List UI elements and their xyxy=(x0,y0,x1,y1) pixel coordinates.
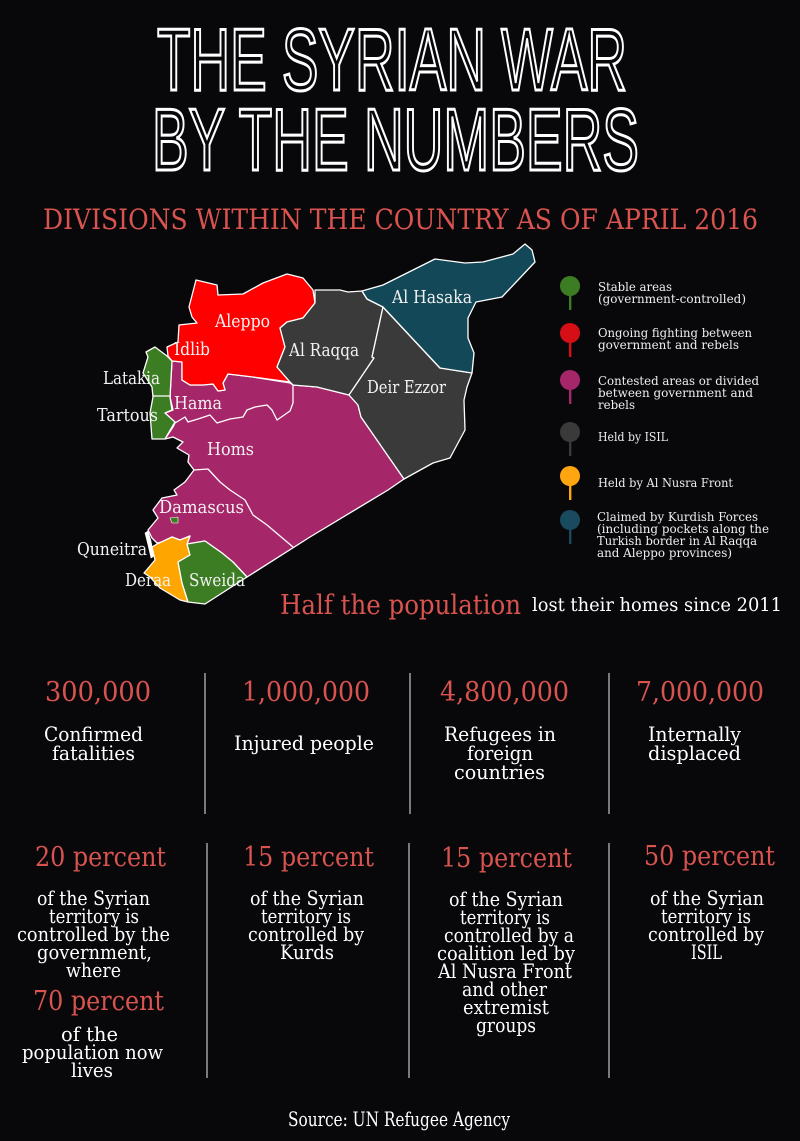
stat: injured xyxy=(234,677,374,755)
stat: refugees: countries xyxy=(454,760,545,784)
legend text: contested: Contested areas or divided xyxy=(598,373,759,388)
legend pin: Kurdish xyxy=(560,510,580,544)
stat: refugees: Refugees in xyxy=(444,722,556,746)
territory: ISIL: of the Syrian xyxy=(650,886,764,910)
region: Sweida xyxy=(178,541,247,604)
stat: refugees: 4,800,000 xyxy=(440,677,569,708)
territory: Kurds: 15 percent xyxy=(243,842,374,873)
headline: half the population: Half the population xyxy=(280,590,521,621)
legend pin: contested xyxy=(560,370,580,404)
territory: Al Nusra coalition: of the Syrian xyxy=(449,887,563,911)
stat: fatalities: fatalities xyxy=(52,741,135,765)
territory: Kurds: territory is xyxy=(261,904,351,928)
legend text: contested: between government and xyxy=(598,385,753,400)
map labels: Damascus xyxy=(159,497,244,518)
legend pin: Al Nusra xyxy=(560,466,580,500)
territory: Al Nusra coalition: 15 percent xyxy=(441,843,572,874)
map labels: Idlib xyxy=(174,339,210,360)
region: Quneitra xyxy=(145,531,154,558)
legend text: Kurdish: (including pockets along the xyxy=(597,521,769,536)
region: ongoing fighting Aleppo Idlib xyxy=(167,274,315,391)
stat: fatalities: Confirmed xyxy=(44,722,143,746)
territory: ISIL: 50 percent xyxy=(644,841,775,872)
territory: government: government, xyxy=(37,940,152,964)
legend text: stable xyxy=(598,279,746,306)
stat: refugees: foreign xyxy=(467,741,533,765)
region: Latakia Tartous xyxy=(143,347,175,439)
stat: internally displaced: 7,000,000 xyxy=(636,677,764,708)
territory: Kurds: Kurds xyxy=(280,940,334,964)
region: Latakia Tartous border xyxy=(153,395,171,397)
map labels: Latakia xyxy=(103,368,160,389)
map labels: Aleppo xyxy=(214,311,270,332)
legend text: ISIL: Held by ISIL xyxy=(598,429,668,444)
territory: government: of the xyxy=(61,1022,118,1046)
territory: Al Nusra coalition: Al Nusra Front xyxy=(437,959,572,983)
stat: refugees xyxy=(440,677,569,784)
territory: government: controlled by the xyxy=(17,922,170,946)
headline: half the population: lost their homes since 2011 xyxy=(532,595,782,616)
map labels: Al Hasaka xyxy=(391,287,472,308)
legend text: stable: (government-controlled) xyxy=(598,291,746,306)
territory: government: territory is xyxy=(49,904,139,928)
legend xyxy=(560,276,769,560)
territory: Kurds: of the Syrian xyxy=(250,886,364,910)
map labels: Al Raqqa xyxy=(288,340,359,361)
territory: government: population now xyxy=(22,1040,163,1064)
map of Syria xyxy=(143,244,535,604)
map labels: Quneitra xyxy=(77,539,147,560)
legend pin: ISIL xyxy=(560,422,580,456)
region: Al Hasaka xyxy=(362,244,535,373)
legend text: Kurdish xyxy=(597,509,769,560)
stat: injured: 1,000,000 xyxy=(242,677,370,708)
stat: fatalities xyxy=(44,677,151,765)
legend text: stable: Stable areas xyxy=(598,279,672,294)
legend text: fighting: government and rebels xyxy=(598,337,739,352)
legend text: fighting xyxy=(598,325,752,352)
source: Source: UN Refugee Agency xyxy=(288,1107,511,1131)
legend pin: stable xyxy=(560,276,580,310)
region: Deraa xyxy=(144,536,190,602)
stat: internally displaced xyxy=(636,677,764,765)
headline: half the population xyxy=(280,590,782,621)
territory: government xyxy=(17,842,170,1082)
map labels: Deraa xyxy=(125,570,171,591)
region: Al Raqqa xyxy=(277,290,383,395)
legend text: Kurdish: Claimed by Kurdish Forces xyxy=(597,509,758,524)
territory: government: 20 percent xyxy=(35,842,166,873)
legend text: Kurdish: Turkish border in Al Raqqa xyxy=(597,533,757,548)
legend text: contested: rebels xyxy=(598,397,635,412)
map labels: Hama xyxy=(174,393,222,414)
territory: Al Nusra coalition: coalition led by xyxy=(437,941,576,965)
territory: Al Nusra coalition: controlled by a xyxy=(444,923,574,947)
dividers row 2 xyxy=(207,843,609,1078)
region: Hama Homs border xyxy=(175,385,293,423)
legend pin: fighting xyxy=(560,323,580,357)
territory: government: of the Syrian xyxy=(37,886,150,910)
region: Deir Ezzor xyxy=(349,307,472,479)
stat: injured: Injured people xyxy=(234,731,374,755)
territory: Al Nusra coalition: territory is xyxy=(460,905,550,929)
territory: government: where xyxy=(66,958,121,982)
legend text: fighting: Ongoing fighting between xyxy=(598,325,752,340)
map labels: Sweida xyxy=(189,570,245,591)
territory: Kurds: controlled by xyxy=(248,922,365,946)
region: Homs Damascus border xyxy=(194,469,293,547)
territory: Al Nusra coalition xyxy=(437,843,576,1037)
territory: ISIL: controlled by xyxy=(648,922,765,946)
region: Damascus enclave xyxy=(170,517,178,523)
map labels: Deir Ezzor xyxy=(367,377,446,398)
territory: Al Nusra coalition: extremist xyxy=(463,995,549,1019)
legend text: contested xyxy=(598,373,759,412)
territory: Al Nusra coalition: groups xyxy=(476,1013,536,1037)
stat: internally displaced: Internally xyxy=(648,722,742,746)
territory: government: lives xyxy=(71,1058,113,1082)
map labels: Homs xyxy=(207,439,254,460)
territory: Al Nusra coalition: and other xyxy=(462,977,547,1001)
region: contested Hama Homs Damascus xyxy=(148,361,404,577)
map labels xyxy=(77,287,472,591)
stat: internally displaced: displaced xyxy=(648,741,741,765)
territory: ISIL: ISIL xyxy=(691,940,722,964)
dividers row 1 xyxy=(205,673,609,814)
legend text: Kurdish: and Aleppo provinces) xyxy=(597,545,732,560)
territory: ISIL: territory is xyxy=(661,904,751,928)
territory: Kurds xyxy=(243,842,374,964)
legend text: Al Nusra: Held by Al Nusra Front xyxy=(598,475,733,490)
title xyxy=(152,10,639,189)
stat: fatalities: 300,000 xyxy=(45,677,151,708)
territory: ISIL xyxy=(644,841,775,964)
territory: government: 70 percent xyxy=(33,986,164,1017)
map labels: Tartous xyxy=(97,405,158,426)
